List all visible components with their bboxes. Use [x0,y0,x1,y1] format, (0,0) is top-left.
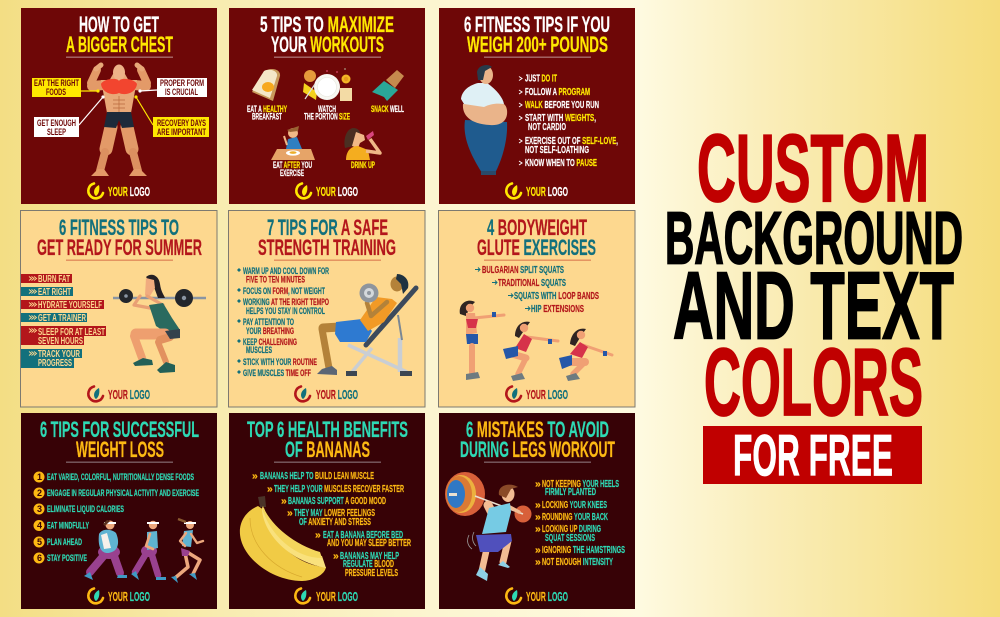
icon: three women running, progressively slimmer [84,519,203,583]
tip list: YOUR BREATHING [246,326,294,336]
exercise list: TRADITIONAL SQUATS [498,278,566,289]
heading: 6 fitness tips to get ready for summer [37,215,202,261]
callout: eat the right foods [32,78,100,97]
benefit list: PRESSURE LEVELS [345,568,398,579]
heading: how to get a bigger chest [66,12,173,58]
mistakes list: » [535,557,541,568]
heading: 6 tips for successful weight loss [40,417,199,463]
heading: 6 fitness tips if you weigh 200+ pounds [464,12,610,58]
tip list: HYDRATE YOURSELF [38,300,102,311]
icon: woman squatting with barbell [113,275,206,373]
icon: overweight man [461,65,507,175]
benefit list: THEY MAY LOWER FEELINGS [294,508,375,519]
icon: man squatting heavy barbell [445,472,532,581]
logo [506,184,568,199]
heading: 6 mistakes to avoid during legs workout: DURING LEGS WORKOUT [460,437,615,462]
benefit list [252,471,411,579]
tip labels: EAT AFTER YOU [273,160,312,170]
tip list: FOCUS ON FORM, NOT WEIGHT [243,286,325,296]
benefit list: » [287,508,293,519]
tip list: START WITH WEIGHTS, [525,113,596,124]
logo: YOUR LOGO [316,589,358,604]
tip list: GIVE MUSCLES TIME OFF [243,368,311,378]
callout: recovery days are important [134,95,209,137]
mistakes list: » [535,500,541,511]
numbered tip list: 6 [37,553,42,563]
mistakes list: ROUNDING YOUR BACK [542,512,608,523]
tip list: KNOW WHEN TO PAUSE [525,158,597,169]
heading: 4 bodyweight glute exercises [477,215,596,261]
tip labels [247,104,404,178]
tip list: EAT RIGHT [38,287,71,298]
tip list: SLEEP FOR AT LEAST [38,327,105,338]
callout: proper form is crucial: IS CRUCIAL [165,87,198,97]
tip list: WORKING AT THE RIGHT TEMPO [243,297,329,307]
icon: snack bar [372,70,404,101]
tip list: JUST DO IT [525,74,557,84]
logo [506,386,568,402]
tip list: PROGRESS [38,358,72,369]
tip list: BURN FAT [38,274,70,285]
mistakes list: NOT KEEPING YOUR HEELS [542,479,619,490]
numbered tip list: 5 [37,537,42,547]
logo: YOUR LOGO [316,387,358,402]
panel: 4 bodyweight glute exercises [438,210,635,407]
logo: YOUR LOGO [108,184,150,199]
icon: man on incline bench [317,274,416,376]
heading: 6 fitness tips if you weigh 200+ pounds: 6 FITNESS TIPS IF YOU [464,12,610,37]
callout: recovery days are important: ARE IMPORTANT [157,127,206,137]
icon: person drinking [344,128,380,160]
tip list: STICK WITH YOUR ROUTINE [243,357,317,367]
benefit list: » [315,530,321,541]
icon: bunch of bananas [240,496,326,581]
headline: custom background and text colors [665,115,963,436]
heading: how to get a bigger chest: A BIGGER CHEST [66,32,173,57]
tip list: EXERCISE OUT OF SELF-LOVE, [525,136,618,147]
callout: eat the right foods: FOODS [46,87,66,97]
icon: person eating [271,126,315,160]
numbered tip list: PLAN AHEAD [47,537,82,547]
panel: how to get a bigger chest [21,8,217,204]
panel: 6 mistakes to avoid during legs workout [439,413,635,609]
logo: YOUR LOGO [526,387,568,402]
mistakes list: » [535,479,541,490]
heading: 7 tips for a safe strength training [258,215,396,261]
heading: top 6 health benefits of bananas [247,417,408,463]
callout: eat the right foods: EAT THE RIGHT [34,78,79,88]
numbered tip list: 2 [37,488,42,498]
benefit list: BANANAS SUPPORT A GOOD MOOD [288,496,386,507]
logo [506,588,568,604]
panel: 6 tips for successful weight loss [21,413,217,609]
tip list: FOLLOW A PROGRAM [525,87,590,98]
heading: 6 mistakes to avoid during legs workout: 6 MISTAKES TO AVOID [466,417,609,442]
heading: 6 tips for successful weight loss: 6 TIPS FOR SUCCESSFUL [40,417,199,442]
mistakes list: » [535,512,541,523]
mistakes list: » [535,524,541,535]
logo: YOUR LOGO [526,184,568,199]
logo [295,588,358,604]
panel: 5 tips to maximize your workouts [229,8,425,204]
tip list: SEVEN HOURS [38,336,83,347]
benefit list: THEY HELP YOUR MUSCLES RECOVER FASTER [274,484,404,495]
tip labels: BREAKFAST [252,112,282,122]
tip list: NOT CARDIO [528,122,566,133]
icon: muscular man [91,64,147,176]
heading: 7 tips for a safe strength training: 7 TIPS FOR A SAFE [267,215,388,240]
mistakes list [535,479,625,568]
benefit list: BANANAS MAY HELP [340,551,399,562]
heading: 6 fitness tips if you weigh 200+ pounds: WEIGH 200+ POUNDS [467,32,608,57]
logo [88,386,150,402]
heading: 5 tips to maximize your workouts [260,12,394,58]
tip list: WARM UP AND COOL DOWN FOR [243,266,329,276]
tip list: NOT SELF-LOATHING [525,145,589,156]
numbered tip list: STAY POSITIVE [47,553,87,563]
icon: woman standing [460,301,504,380]
badge: for free [703,424,922,488]
callout: proper form is crucial [138,78,207,97]
heading: 5 tips to maximize your workouts: 5 TIPS TO MAXIMIZE [260,12,394,37]
panel: 6 fitness tips to get ready for summer [20,210,217,407]
logo [296,184,358,199]
tip list: FIVE TO TEN MINUTES [246,274,305,284]
numbered tip list: 3 [37,504,42,514]
tip labels: THE PORTION SIZE [304,112,350,122]
numbered tip list: EAT VARIED, COLORFUL, NUTRITIONALLY DENSE FOODS [47,472,194,482]
heading: 7 tips for a safe strength training: STRENGTH TRAINING [258,235,396,260]
callout: get enough sleep: SLEEP [47,127,66,137]
tip list: TRACK YOUR [38,349,80,360]
mistakes list: FIRMLY PLANTED [545,487,596,498]
heading: 4 bodyweight glute exercises: 4 BODYWEIGHT [487,215,587,240]
numbered tip list: EAT MINDFULLY [47,520,89,530]
mistakes list: LOOKING UP DURING [542,524,601,535]
logo [88,184,150,199]
icon: woman half squat [503,322,558,381]
tip list [21,274,106,369]
benefit list: » [281,496,287,507]
numbered tip list [34,472,199,564]
heading: 6 mistakes to avoid during legs workout [460,417,615,463]
panel: top 6 health benefits of bananas [229,413,425,609]
panel: 7 tips for a safe strength training [228,210,425,407]
heading: top 6 health benefits of bananas: OF BANANAS [285,437,370,462]
logo: YOUR LOGO [526,589,568,604]
logo [295,386,358,402]
panel: 6 fitness tips if you weigh 200+ pounds [439,8,635,204]
benefit list: » [267,484,273,495]
heading: 6 fitness tips to get ready for summer: 6 FITNESS TIPS TO [59,215,179,240]
icon: woman deep squat [559,329,612,381]
icon: plate and portion [303,68,352,101]
tip labels: WATCH [318,104,336,114]
logo [88,588,150,604]
heading: how to get a bigger chest: HOW TO GET [79,12,159,37]
callout: proper form is crucial: PROPER FORM [160,78,204,88]
mistakes list: » [535,545,541,556]
benefit list: BANANAS HELP TO BUILD LEAN MUSCLE [260,471,374,482]
tip list: WALK BEFORE YOU RUN [525,100,599,111]
heading: 6 fitness tips to get ready for summer: GET READY FOR SUMMER [37,235,202,260]
tip labels: SNACK WELL [371,104,404,114]
callout: get enough sleep [34,95,105,137]
benefit list: EAT A BANANA BEFORE BED [323,530,403,541]
tip list: KEEP CHALLENGING [243,337,297,347]
numbered tip list: ENGAGE IN REGULAR PHYSICAL ACTIVITY AND EXERCISE [47,488,199,498]
exercise list: SQUATS WITH LOOP BANDS [514,291,599,302]
callout: get enough sleep: GET ENOUGH [37,118,76,128]
mistakes list: LOCKING YOUR KNEES [542,500,607,511]
numbered tip list: 1 [37,472,42,482]
tip list [519,74,618,169]
heading: 6 tips for successful weight loss: WEIGHT LOSS [76,437,164,462]
heading: 4 bodyweight glute exercises: GLUTE EXERCISES [477,235,596,260]
tip list: MUSCLES [246,345,272,355]
mistakes list: SQUAT SESSIONS [545,533,595,544]
numbered tip list: ELIMINATE LIQUID CALORIES [47,504,124,514]
callout: recovery days are important: RECOVERY DAYS [157,118,206,128]
benefit list: » [252,471,258,482]
heading: top 6 health benefits of bananas: TOP 6 HEALTH BENEFITS [247,417,408,442]
icon: toast with egg [252,69,280,101]
tip list [237,266,329,378]
benefit list: AND YOU MAY SLEEP BETTER [327,538,411,549]
benefit list: OF ANXIETY AND STRESS [299,517,371,528]
tip labels: EAT A HEALTHY [247,104,287,114]
mistakes list: IGNORING THE HAMSTRINGS [542,545,625,556]
tip list: GET A TRAINER [38,313,86,324]
benefit list: » [333,551,339,562]
exercise list: HIP EXTENSIONS [531,304,584,315]
heading: 5 tips to maximize your workouts: YOUR WORKOUTS [271,32,384,57]
tip list: HELPS YOU STAY IN CONTROL [246,306,325,316]
benefit list: REGULATE BLOOD [343,559,394,570]
tip labels: DRINK UP [351,160,375,170]
tip list: PAY ATTENTION TO [243,317,294,327]
logo: YOUR LOGO [108,589,150,604]
tip labels: EXERCISE [280,168,304,178]
numbered tip list: 4 [37,520,42,530]
exercise list [475,265,599,315]
exercise list: BULGARIAN SPLIT SQUATS [482,265,564,276]
logo: YOUR LOGO [108,387,150,402]
mistakes list: NOT ENOUGH INTENSITY [542,557,613,568]
logo: YOUR LOGO [316,184,358,199]
